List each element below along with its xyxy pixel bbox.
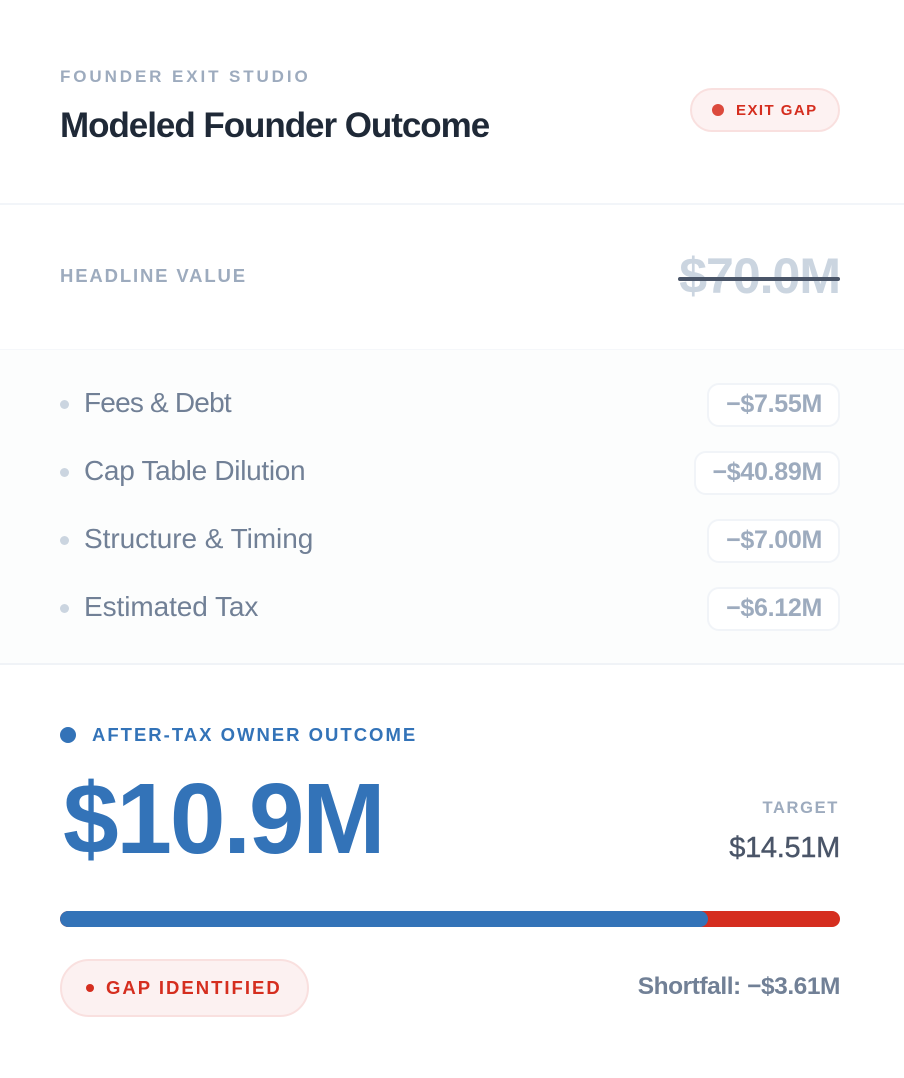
outcome value: $10.9M xyxy=(63,763,383,875)
struck-through value xyxy=(678,248,840,304)
outcome section xyxy=(60,724,840,1017)
target label: TARGET xyxy=(762,799,839,817)
deductions panel xyxy=(0,349,904,665)
outcome dot xyxy=(60,727,76,743)
badge text: EXIT GAP xyxy=(736,102,818,119)
badge dot xyxy=(712,104,724,116)
target value: $14.51M xyxy=(729,832,840,864)
target block xyxy=(729,799,840,864)
deduction: estimated tax: Estimated Tax xyxy=(84,591,258,622)
value text: $70.0M xyxy=(679,248,840,304)
progress bar xyxy=(60,911,840,927)
deduction: cap table dilution: −$40.89M xyxy=(712,458,822,486)
deduction: structure and timing: −$7.00M xyxy=(726,526,822,554)
deduction: structure and timing: Structure & Timing xyxy=(84,523,313,554)
deduction: cap table dilution: Cap Table Dilution xyxy=(84,455,305,486)
title: Modeled Founder Outcome xyxy=(60,106,489,145)
deduction: cap table dilution xyxy=(60,451,840,495)
deduction: fees and debt: −$7.55M xyxy=(726,390,822,418)
badge: exit gap xyxy=(690,88,840,132)
eyebrow label: FOUNDER EXIT STUDIO xyxy=(60,67,311,86)
deduction: fees and debt xyxy=(60,383,840,427)
deduction: estimated tax: −$6.12M xyxy=(726,594,822,622)
headline value section xyxy=(60,248,840,304)
deduction: structure and timing xyxy=(60,519,840,563)
badge dot xyxy=(86,984,94,992)
headline label: HEADLINE VALUE xyxy=(60,265,247,286)
badge: gap identified xyxy=(60,959,309,1017)
shortfall: Shortfall: −$3.61M xyxy=(638,973,840,1000)
badge text: GAP IDENTIFIED xyxy=(106,977,282,998)
deduction: estimated tax xyxy=(60,587,840,631)
strike line xyxy=(678,277,840,281)
header section xyxy=(60,67,840,145)
outcome label: AFTER-TAX OWNER OUTCOME xyxy=(92,724,417,745)
progress fill xyxy=(60,911,708,927)
deduction: fees and debt: Fees & Debt xyxy=(84,387,231,418)
